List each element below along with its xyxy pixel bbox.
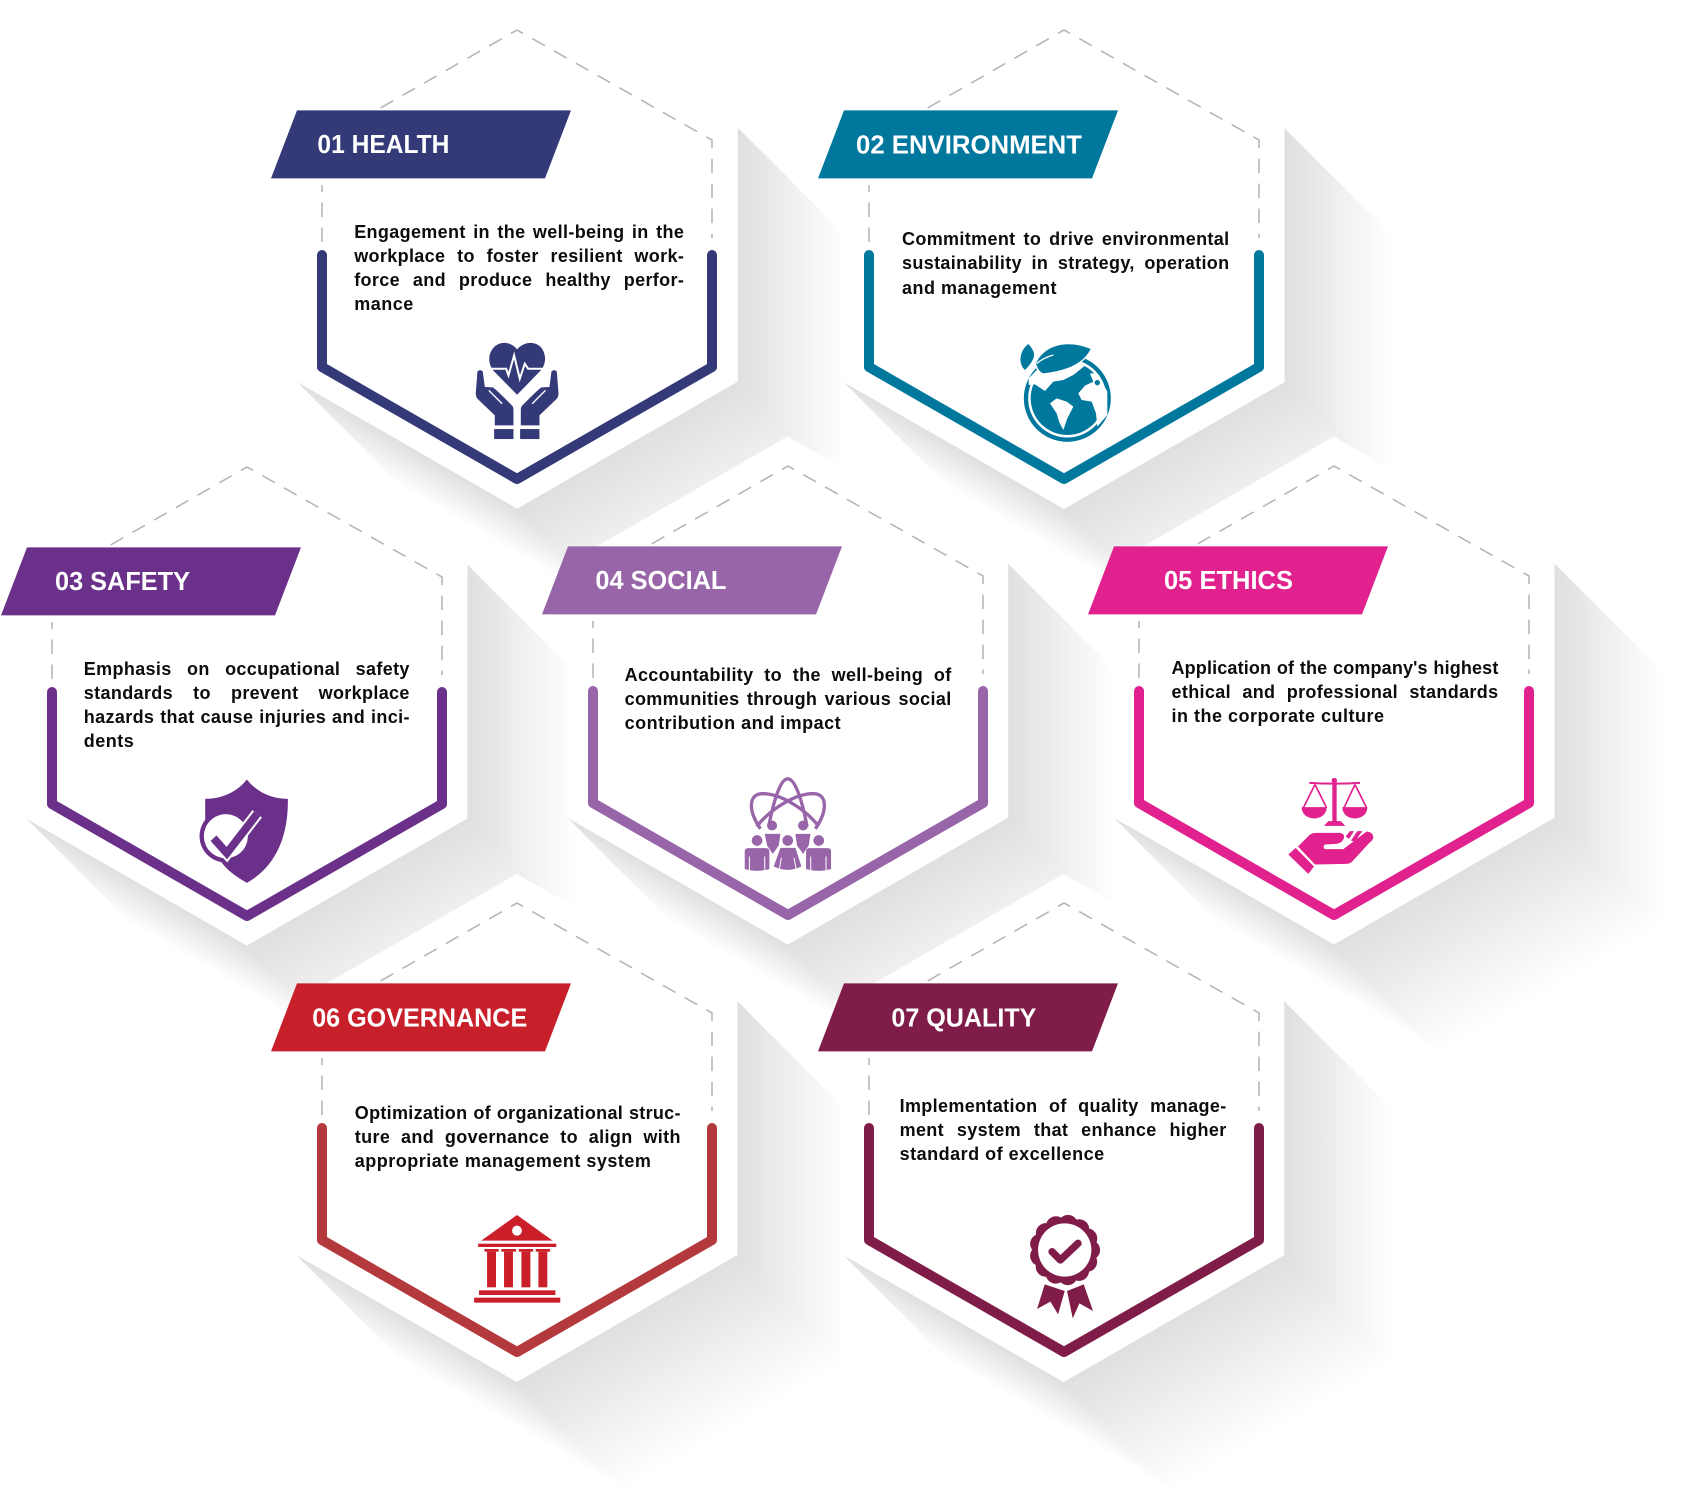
- body text: social: Accountability to the well-being of: [625, 665, 952, 685]
- banner: 01 health: 01 HEALTH: [318, 129, 450, 159]
- banner: 05 ethics: 05 ETHICS: [1164, 564, 1293, 594]
- panel: 07 quality: [818, 902, 1264, 1357]
- body text: social: [625, 665, 952, 733]
- body text: governance: ture and governance to align with: [355, 1127, 681, 1147]
- panel: 03 safety: [1, 466, 447, 921]
- icon: heart in caring hands: [476, 342, 559, 439]
- body text: governance: appropriate management system: [355, 1151, 651, 1171]
- banner: 02 environment: 02 ENVIRONMENT: [856, 129, 1082, 159]
- banner: 03 safety: [1, 547, 301, 615]
- panel: 04 social: [542, 465, 988, 920]
- solid hexagon outline: [1139, 690, 1529, 914]
- body text: safety: hazards that cause injuries and inci-: [84, 707, 410, 727]
- panel: 02 environment: [818, 29, 1264, 484]
- panel: 05 ethics: [1088, 465, 1534, 920]
- panel: 06 governance: [271, 902, 717, 1357]
- banner: 01 health: [271, 110, 571, 178]
- solid hexagon outline: [322, 1128, 712, 1352]
- body text: health: Engagement in the well-being in the: [354, 222, 684, 242]
- banner: 06 governance: 06 GOVERNANCE: [312, 1002, 527, 1032]
- body text: quality: [900, 1096, 1227, 1164]
- body text: environment: [902, 229, 1230, 298]
- banner: 07 quality: [818, 983, 1118, 1051]
- body text: quality: ment system that enhance higher: [900, 1120, 1227, 1140]
- banner: 05 ethics: [1088, 546, 1388, 614]
- icon: shield with check mark: [199, 779, 288, 882]
- banner: 06 governance: [271, 983, 571, 1051]
- solid hexagon outline: [52, 692, 442, 916]
- body text: quality: standard of excellence: [900, 1144, 1105, 1164]
- solid hexagon outline: [593, 690, 983, 914]
- body text: safety: standards to prevent workplace: [84, 683, 410, 703]
- panel: 01 health: [271, 29, 717, 484]
- body text: ethics: [1172, 658, 1498, 726]
- body text: ethics: in the corporate culture: [1172, 706, 1385, 726]
- banner: 02 environment: [818, 110, 1118, 178]
- solid hexagon outline: [322, 255, 712, 479]
- icon: award rosette with check: [1027, 1213, 1102, 1318]
- icon: globe with leaves: [1020, 344, 1109, 440]
- body text: social: contribution and impact: [625, 713, 841, 733]
- body text: environment: and management: [902, 278, 1057, 298]
- icon: scales over open hand: [1288, 777, 1373, 873]
- body text: health: workplace to foster resilient work-: [354, 246, 684, 266]
- body text: governance: Optimization of organizational struc-: [355, 1103, 681, 1123]
- banner: 04 social: [542, 546, 842, 614]
- banner: 07 quality: 07 QUALITY: [891, 1002, 1036, 1032]
- body text: ethics: ethical and professional standards: [1172, 682, 1498, 702]
- solid hexagon outline: [869, 1128, 1259, 1352]
- body text: environment: Commitment to drive environmental: [902, 229, 1230, 249]
- banner: 03 safety: 03 SAFETY: [55, 566, 190, 596]
- body text: health: force and produce healthy perfor-: [354, 270, 684, 290]
- banner: 04 social: 04 SOCIAL: [595, 564, 726, 594]
- icon: classical bank building: [474, 1215, 560, 1303]
- body text: governance: [354, 1103, 681, 1171]
- body text: health: mance: [354, 294, 414, 314]
- solid hexagon outline: [869, 255, 1259, 479]
- body text: safety: [84, 659, 410, 751]
- body text: safety: Emphasis on occupational safety: [84, 659, 410, 679]
- icon: people under an atom: [744, 778, 831, 870]
- body text: health: [354, 222, 684, 314]
- body text: environment: sustainability in strategy, operation: [902, 253, 1230, 273]
- body text: safety: dents: [84, 731, 134, 751]
- body text: ethics: Application of the company's highest: [1172, 658, 1498, 678]
- body text: social: communities through various social: [625, 689, 952, 709]
- body text: quality: Implementation of quality manage-: [900, 1096, 1227, 1116]
